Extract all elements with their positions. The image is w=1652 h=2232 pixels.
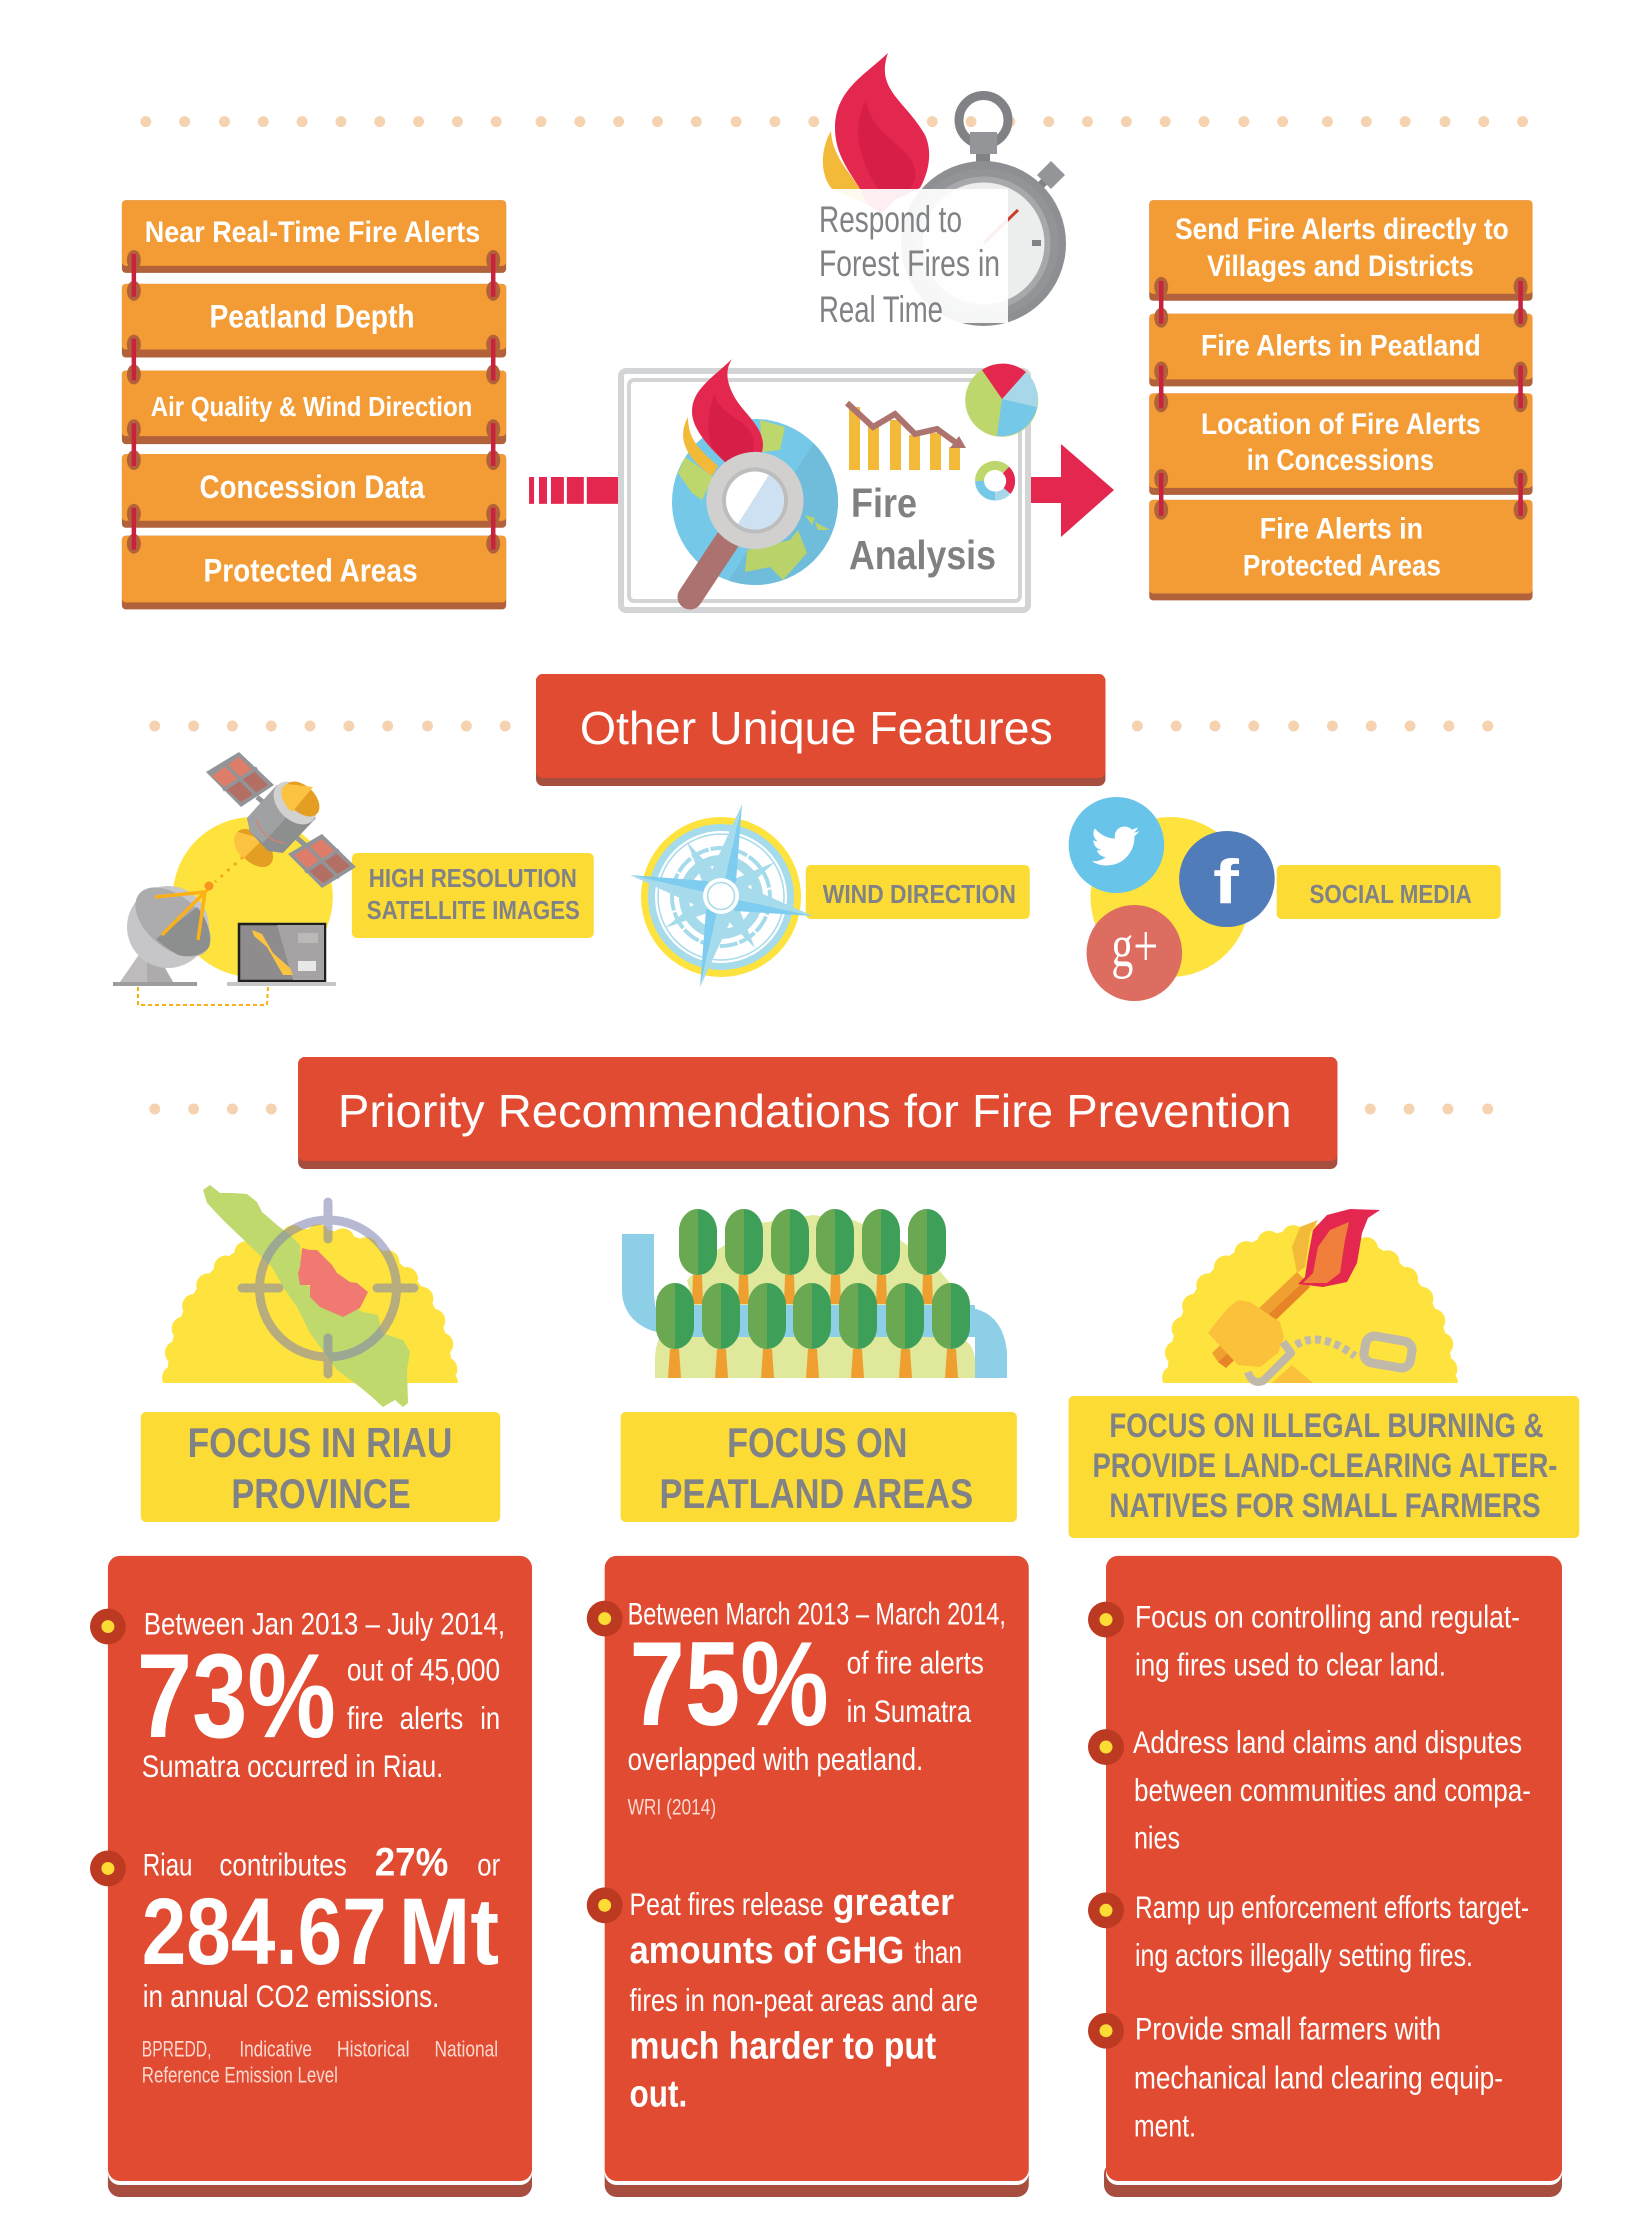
text: fact two <box>630 1882 978 2115</box>
text: output labels: Villages and Districts <box>1207 250 1474 283</box>
text: input labels: Near Real-Time Fire Alerts <box>145 216 480 249</box>
bullet <box>90 1609 126 1644</box>
label: focus in riau: FOCUS IN RIAU <box>188 1419 452 1466</box>
text: output labels: Fire Alerts in <box>1260 513 1423 546</box>
dashed connector <box>138 987 268 1005</box>
text: fact one: Between March 2013 – March 2014, <box>628 1596 1006 1632</box>
icon: flame <box>683 359 763 476</box>
text: fact one <box>628 1596 1006 1777</box>
text: fact one: 73% <box>137 1630 336 1763</box>
source note <box>142 2037 498 2088</box>
tree crowns <box>656 1209 970 1349</box>
strings connecting boards <box>127 250 500 554</box>
heading: other unique features <box>536 674 1105 786</box>
text: action two <box>1133 1724 1531 1856</box>
panel: input data stack <box>122 200 506 609</box>
label: high resolution satellite images: HIGH RESOLUTION <box>369 865 577 893</box>
text: output labels <box>1175 213 1509 583</box>
source note: WRI (2014) <box>628 1795 716 1820</box>
text: fact two: much harder to put <box>630 2026 937 2068</box>
icon: magnifying glass <box>690 452 804 597</box>
text: output labels: Fire Alerts in Peatland <box>1201 330 1481 363</box>
text: fact one: out of 45,000 <box>347 1651 500 1687</box>
icon: flame <box>823 53 929 213</box>
icon: satellite dish <box>113 874 223 986</box>
label: social media: SOCIAL MEDIA <box>1310 881 1472 909</box>
text: fact two: Riau <box>143 1846 193 1882</box>
text: fact two: fires in non-peat areas and are <box>630 1982 978 2018</box>
label: illegal burning: PROVIDE LAND-CLEARING ALTER- <box>1093 1447 1557 1485</box>
bullet <box>587 1601 623 1637</box>
icon: peatland trees <box>622 1209 1007 1378</box>
bullet <box>587 1887 623 1923</box>
text: action four: ment. <box>1134 2107 1196 2143</box>
text: fact one <box>137 1606 505 1784</box>
source note: BPREDD, <box>142 2037 211 2062</box>
arrow: output arrow <box>1031 444 1114 537</box>
text: action three: ing actors illegally setting fires. <box>1135 1937 1473 1973</box>
text: fact one: of fire alerts <box>847 1644 984 1680</box>
text: fact two: Peat fires release <box>630 1886 824 1922</box>
icon: satellite system <box>113 752 356 1005</box>
bar chart with trend line <box>847 403 966 470</box>
tagline: Forest Fires in <box>819 243 1000 284</box>
bullets <box>1088 1602 1124 2049</box>
icon: satellite <box>206 752 356 888</box>
panel: riau facts <box>90 1556 532 2197</box>
text: input labels: Peatland Depth <box>210 298 415 335</box>
text: fact two: greater <box>833 1882 954 1924</box>
label: focus on peatland <box>621 1412 1017 1522</box>
label: high resolution satellite images: SATELLITE IMAGES <box>367 897 580 925</box>
text: action four: Provide small farmers with <box>1135 2011 1441 2047</box>
source note: Indicative <box>239 2037 312 2062</box>
icon: laptop with map <box>227 924 336 986</box>
label: high resolution satellite images <box>352 853 594 938</box>
panel: fire analysis <box>621 359 1038 610</box>
panel: illegal burning actions <box>1088 1556 1562 2197</box>
text: action four: mechanical land clearing equip- <box>1134 2060 1503 2095</box>
tagline <box>819 199 1000 330</box>
text: output labels: in Concessions <box>1247 444 1434 477</box>
heading: other unique features: Other Unique Features <box>580 702 1053 754</box>
text: input labels: Protected Areas <box>204 552 418 589</box>
label: illegal burning: FOCUS ON ILLEGAL BURNING & <box>1109 1407 1543 1445</box>
frame <box>621 371 1028 610</box>
label: focus in riau: PROVINCE <box>231 1470 411 1517</box>
panel: output alerts stack <box>1149 200 1533 600</box>
text: action one: ing fires used to clear land. <box>1135 1646 1446 1682</box>
icon: compass <box>630 804 813 987</box>
text: input labels <box>145 216 480 589</box>
icon: globe <box>672 419 838 585</box>
text: fact two: out. <box>630 2073 687 2115</box>
text: output labels: Send Fire Alerts directly to <box>1175 213 1509 246</box>
text: action four <box>1134 2011 1503 2143</box>
text: action three: Ramp up enforcement efforts target- <box>1135 1889 1529 1925</box>
trunks <box>668 1275 958 1378</box>
strings connecting boards <box>1154 277 1528 520</box>
icon: pie chart <box>965 364 1038 437</box>
label: focus in riau <box>141 1412 500 1522</box>
icon: torch and handcuffs <box>1162 1209 1458 1386</box>
icon: stopwatch <box>901 96 1066 326</box>
tagline: Real Time <box>819 289 943 330</box>
text: fact one: fire <box>347 1700 384 1736</box>
source note: Historical <box>337 2037 410 2062</box>
text: fact two: than <box>914 1934 962 1970</box>
arrow: dashed input arrow <box>529 477 619 504</box>
label: illegal burning <box>1069 1396 1579 1538</box>
text: fact two: 27% <box>375 1840 448 1884</box>
text: fact two: Mt <box>399 1879 499 1985</box>
label: wind direction: WIND DIRECTION <box>823 881 1016 909</box>
heading: priority recommendations <box>298 1057 1337 1169</box>
source note: National <box>434 2037 498 2062</box>
text: input labels: Concession Data <box>200 468 425 505</box>
text: fact one: overlapped with peatland. <box>628 1741 923 1777</box>
text: action one <box>1135 1599 1520 1682</box>
icon: facebook <box>1179 831 1275 927</box>
text: fact two: or <box>477 1846 500 1882</box>
heading: priority recommendations: Priority Recommendations for Fire Prevention <box>338 1085 1292 1137</box>
text: fact one: in <box>480 1700 500 1736</box>
icon: twitter <box>1069 797 1164 893</box>
icon: dotted signal <box>215 857 243 882</box>
icon: social media <box>1069 797 1275 1001</box>
text: action three <box>1135 1889 1529 1973</box>
text: fact one: Sumatra occurred in Riau. <box>142 1748 443 1784</box>
title: fire analysis: Analysis <box>849 532 996 578</box>
text: action one: Focus on controlling and regulat- <box>1135 1599 1520 1635</box>
text: fact one: Between Jan 2013 – July 2014, <box>144 1606 505 1642</box>
tagline: Respond to <box>819 199 962 240</box>
text: fact two: amounts of GHG <box>630 1930 904 1972</box>
text: output labels: Protected Areas <box>1243 550 1441 583</box>
text: fact two <box>142 1840 500 2014</box>
label: focus on peatland: FOCUS ON <box>727 1419 907 1466</box>
label: illegal burning: NATIVES FOR SMALL FARMERS <box>1109 1487 1540 1525</box>
label: focus on peatland: PEATLAND AREAS <box>659 1470 973 1517</box>
text: action two: between communities and compa- <box>1134 1772 1531 1808</box>
text: fact one: 75% <box>630 1618 829 1751</box>
source note: Reference Emission Level <box>142 2063 338 2088</box>
icon: donut chart <box>979 465 1011 496</box>
text: fact two: 284.67 <box>142 1879 387 1985</box>
title: fire analysis <box>849 480 996 578</box>
text: fact two: in annual CO2 emissions. <box>143 1978 439 2014</box>
label: social media <box>1277 865 1501 919</box>
label: wind direction <box>806 865 1030 919</box>
bullet <box>90 1851 126 1886</box>
text: output labels: Location of Fire Alerts <box>1201 408 1481 441</box>
icon: riau target map <box>162 1185 458 1407</box>
icon: facebook: f <box>1213 848 1239 917</box>
text: fact two: contributes <box>219 1846 347 1882</box>
icon: stopwatch with flame and tagline <box>819 53 1066 330</box>
icon: google plus <box>1087 905 1182 1001</box>
panel: peatland facts <box>587 1556 1029 2197</box>
icon: google plus: g+ <box>1111 913 1158 979</box>
text: fact one: alerts <box>400 1700 463 1736</box>
text: input labels: Air Quality & Wind Direction <box>151 391 472 422</box>
text: fact one: in Sumatra <box>847 1693 971 1729</box>
text: action two: Address land claims and disputes <box>1133 1724 1522 1760</box>
title: fire analysis: Fire <box>851 480 917 526</box>
text: action two: nies <box>1134 1820 1180 1856</box>
